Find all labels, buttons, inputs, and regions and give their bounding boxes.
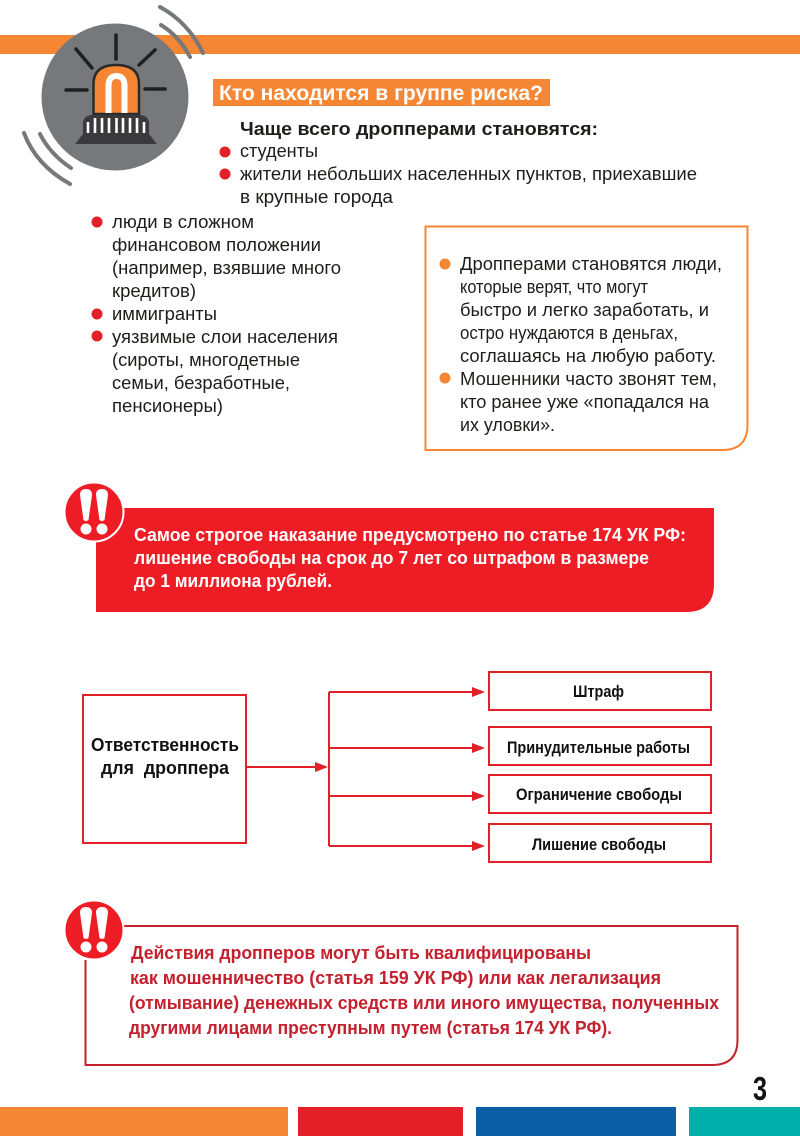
panel: orange note: их уловки». — [460, 415, 555, 435]
text block: vulnerable groups list: кредитов) — [112, 281, 196, 301]
callout: legal qualification: как мошенничество (статья 159 УК РФ) или как легализация — [130, 968, 661, 988]
text block: who becomes a dropper: жители небольших населенных пунктов, приехавшие — [240, 164, 697, 184]
text block: who becomes a dropper — [220, 119, 697, 207]
text block: vulnerable groups list: (сироты, многодетные — [112, 350, 300, 370]
callout: strictest punishment — [96, 508, 714, 612]
callout: strictest punishment: Самое строгое наказание предусмотрено по статье 174 УК РФ: — [134, 525, 686, 545]
diagram: responsibility for a dropper — [83, 672, 711, 862]
panel: orange note: которые верят, что могут — [460, 277, 648, 297]
panel: orange note: кто ранее уже «попадался на — [460, 392, 710, 412]
callout: legal qualification: другими лицами преступным путем (статья 174 УК РФ). — [129, 1018, 612, 1038]
panel: orange note: остро нуждаются в деньгах, — [460, 323, 678, 343]
text block: vulnerable groups list: финансовом положении — [112, 235, 321, 255]
box: forced labour — [489, 727, 711, 765]
bottom colour bars — [0, 1107, 800, 1136]
box: restriction of freedom: Ограничение свободы — [516, 785, 682, 804]
arrows — [247, 687, 485, 851]
box: fine: Штраф — [573, 682, 624, 701]
box: responsibility: Ответственность — [91, 735, 239, 755]
callout: strictest punishment: лишение свободы на срок до 7 лет со штрафом в размере — [134, 548, 649, 568]
text block: who becomes a dropper: студенты — [240, 141, 318, 161]
panel: orange note: соглашаясь на любую работу. — [460, 346, 716, 366]
icon: exclamation marks — [64, 482, 124, 542]
callout: legal qualification: (отмывание) денежных средств или иного имущества, полученных — [129, 993, 719, 1013]
box: responsibility — [83, 695, 246, 843]
box: responsibility: для дроппера — [101, 758, 230, 778]
top orange bar — [0, 35, 800, 54]
callout: legal qualification: Действия дропперов могут быть квалифицированы — [131, 943, 591, 963]
text block: vulnerable groups list: люди в сложном — [112, 212, 254, 232]
box: fine — [489, 672, 711, 710]
box: forced labour: Принудительные работы — [507, 738, 690, 757]
icon: siren — [24, 7, 203, 184]
text block: vulnerable groups list — [92, 212, 341, 416]
text block: vulnerable groups list: (например, взявшие много — [112, 258, 341, 278]
panel: orange note: Мошенники часто звонят тем, — [460, 369, 717, 389]
page number: 3 — [753, 1070, 767, 1107]
text block: vulnerable groups list: уязвимые слои населения — [112, 327, 338, 347]
box: imprisonment: Лишение свободы — [532, 835, 666, 854]
panel: orange note: быстро и легко заработать, и — [460, 300, 709, 320]
icon: exclamation marks — [64, 900, 124, 960]
heading: Кто находится в группе риска? — [219, 82, 543, 105]
box: imprisonment — [489, 824, 711, 862]
panel: orange note — [426, 226, 748, 450]
text block: vulnerable groups list: иммигранты — [112, 304, 217, 324]
callout: legal qualification — [86, 926, 738, 1065]
text block: vulnerable groups list: семьи, безработные, — [112, 373, 290, 393]
text block: who becomes a dropper: в крупные города — [240, 187, 394, 207]
panel: orange note: Дропперами становятся люди, — [460, 254, 722, 274]
box: restriction of freedom — [489, 775, 711, 813]
text block: who becomes a dropper: Чаще всего дропперами становятся: — [240, 119, 598, 139]
callout: strictest punishment: до 1 миллиона рублей. — [134, 571, 332, 591]
text block: vulnerable groups list: пенсионеры) — [112, 396, 223, 416]
